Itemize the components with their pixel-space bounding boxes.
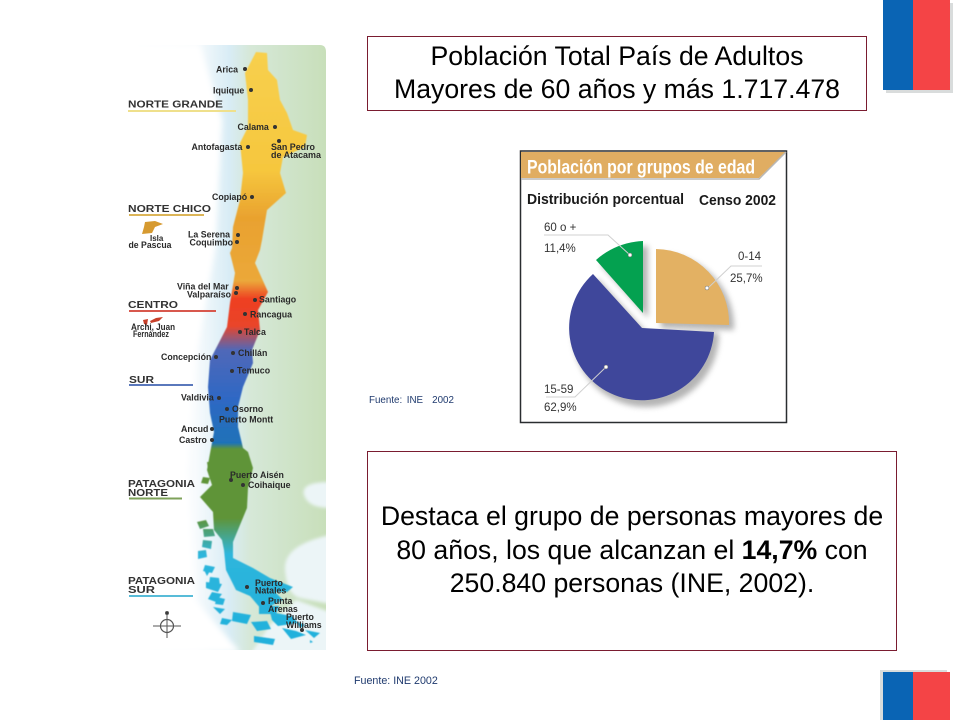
city labels: Arica (216, 64, 238, 74)
panel header band: Población por grupos de edad (527, 158, 755, 178)
city labels: Valparaíso (187, 290, 232, 300)
pie slice: 0-14 (656, 249, 729, 325)
pie labels: 60 o + (544, 222, 577, 234)
region labels: SUR (128, 584, 156, 596)
callout box: 250.840 personas (INE, 2002). (450, 568, 814, 598)
pie labels: 62,9% (544, 402, 577, 414)
chart subtitles: Distribución porcentual (527, 192, 684, 208)
city labels: Fernández (133, 329, 169, 339)
country outline (197, 52, 320, 645)
title box: Mayores de 60 años y más 1.717.478 (394, 74, 840, 104)
city labels: Copiapó (212, 192, 248, 202)
city labels: Puerto Montt (219, 414, 273, 424)
region labels: PATAGONIA (128, 575, 195, 587)
city labels: Temuco (237, 366, 271, 376)
pie slice: 15-59 (569, 274, 714, 400)
region underlines (128, 110, 236, 597)
city labels: Isla (150, 234, 164, 243)
city labels: Osorno (232, 404, 264, 414)
pie labels: 15-59 (544, 384, 573, 396)
city labels: Coihaique (248, 480, 291, 490)
region labels: SUR (129, 374, 154, 386)
callout box: 80 años, los que alcanzan el 14,7% con (396, 534, 868, 564)
chart subtitles (527, 192, 776, 209)
callout box: Destaca el grupo de personas mayores de (381, 501, 883, 531)
region labels: PATAGONIA (128, 478, 195, 490)
city labels: Puerto (286, 612, 314, 622)
city labels: Arenas (268, 604, 298, 614)
city labels: Puerto Aisén (230, 470, 284, 480)
city labels: Rancagua (250, 310, 292, 320)
city labels: Archi, Juan (131, 322, 175, 332)
city labels: La Serena (188, 230, 230, 240)
chart subtitles: Censo 2002 (699, 193, 776, 209)
compass (153, 612, 181, 638)
pie shadows (573, 246, 734, 407)
pie labels: 25,7% (730, 273, 763, 285)
city labels: Ancud (181, 424, 208, 434)
islands (142, 221, 163, 234)
flag: top right (883, 0, 953, 93)
pie chart panel (520, 151, 786, 422)
title box (367, 36, 867, 110)
pie labels: 11,4% (544, 243, 576, 255)
city labels: Antofagasta (192, 142, 242, 152)
region labels: NORTE CHICO (128, 203, 211, 215)
city labels: Iquique (213, 86, 244, 96)
city labels: Viña del Mar (177, 282, 229, 292)
flag: bottom right (880, 670, 950, 720)
city labels: de Atacama (271, 150, 321, 160)
map background (197, 45, 326, 650)
city dots (210, 67, 304, 632)
city labels: Castro (179, 435, 207, 445)
city labels: Concepción (161, 352, 211, 362)
city labels: Valdivia (181, 392, 214, 402)
city labels: Natales (255, 586, 286, 596)
region labels: CENTRO (128, 299, 178, 311)
source note: bottom: Fuente: INE 2002 (354, 675, 438, 687)
city labels: Chillán (238, 348, 267, 358)
region labels (128, 98, 223, 596)
city labels: de Pascua (128, 240, 172, 250)
leader lines (544, 235, 762, 397)
city labels: Santiago (259, 294, 297, 304)
city labels: Punta (268, 596, 293, 606)
source note: chart: Fuente: INE 2002 (369, 395, 454, 406)
city labels: Talca (244, 327, 266, 337)
city labels (128, 64, 322, 630)
title box: Población Total País de Adultos (431, 40, 803, 70)
city labels: San Pedro (271, 142, 316, 152)
pie slice: 60 o + (596, 241, 643, 313)
pie labels (544, 222, 763, 414)
city labels: Coquimbo (190, 238, 234, 248)
city labels: Puerto (255, 578, 283, 588)
region labels: NORTE (128, 487, 168, 499)
callout box (367, 451, 897, 651)
city labels: Williams (286, 620, 322, 630)
region labels: NORTE GRANDE (128, 98, 223, 110)
city labels: Calama (238, 122, 269, 132)
map of Chile (128, 45, 788, 650)
pie labels: 0-14 (738, 251, 762, 263)
